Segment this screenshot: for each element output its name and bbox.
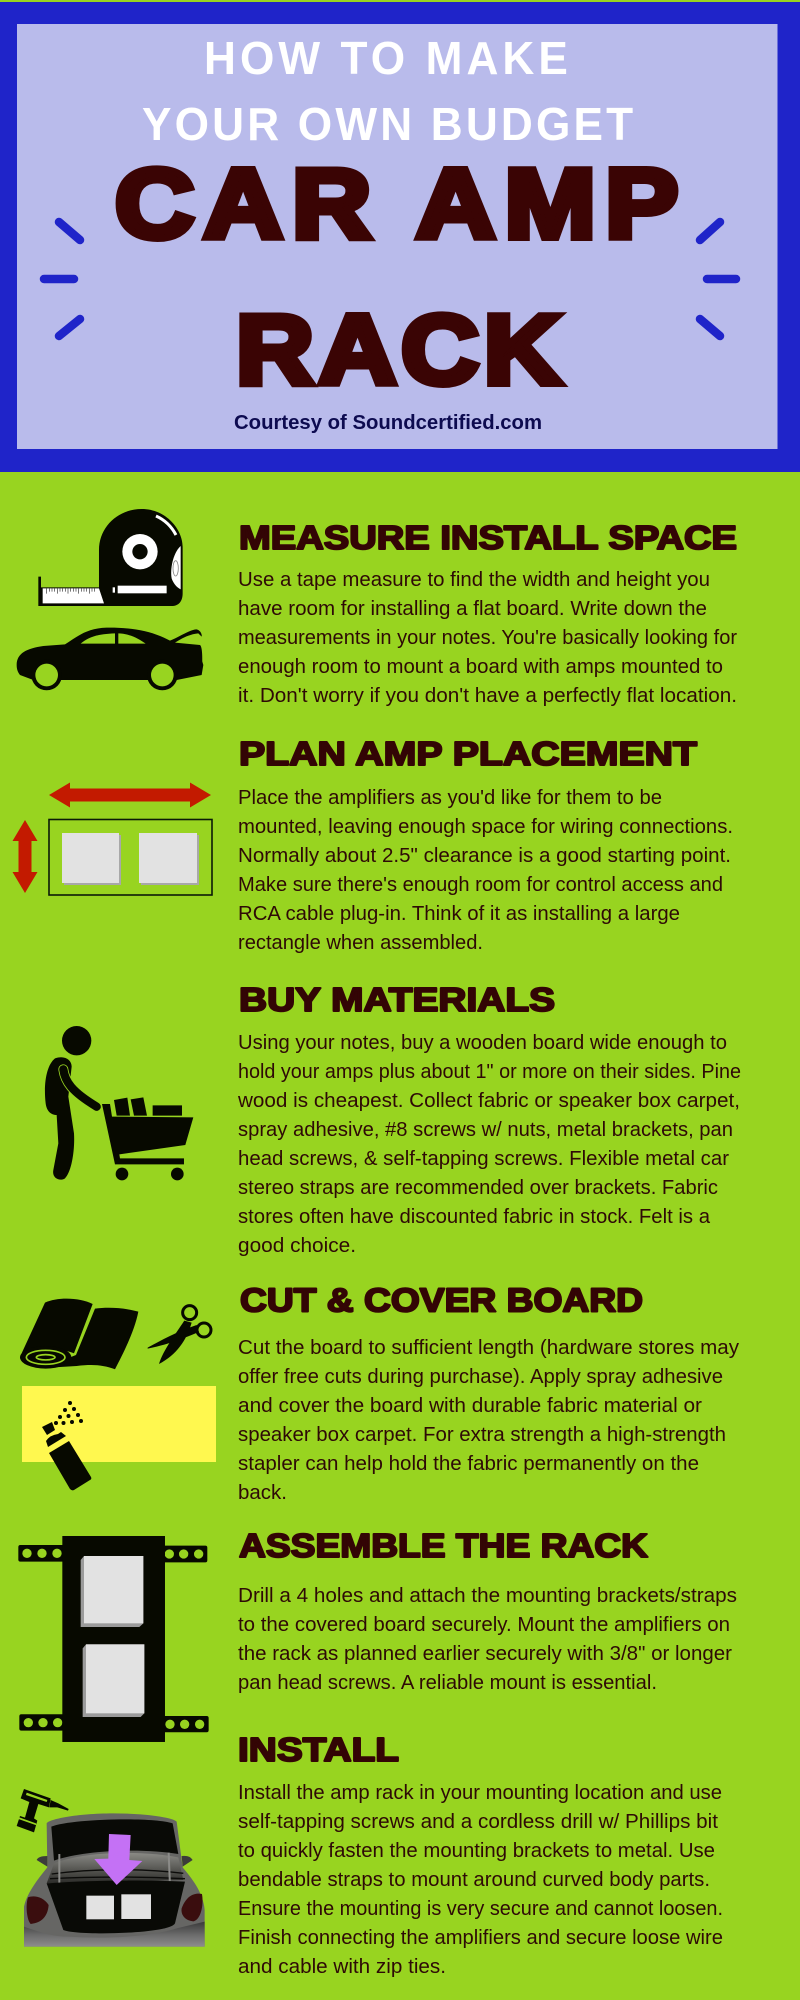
amp top bbox=[81, 1556, 143, 1627]
body text: hold your amps plus about 1" or more on their sides. Pine bbox=[238, 1061, 741, 1083]
board outline bbox=[49, 820, 212, 895]
amp right bbox=[121, 1894, 151, 1919]
heading: INSTALL bbox=[238, 1731, 399, 1768]
icon: shopper with cart bbox=[45, 1026, 193, 1180]
icon: cordless drill bbox=[17, 1789, 69, 1832]
body text: measurements in your notes. You're basically looking for bbox=[238, 627, 737, 649]
body text: good choice. bbox=[238, 1235, 356, 1257]
car body bbox=[24, 1813, 205, 1947]
amp 1 bbox=[62, 833, 121, 885]
body text: Ensure the mounting is very secure and cannot loosen. bbox=[238, 1898, 723, 1920]
icon: scissors bbox=[148, 1306, 211, 1364]
icon: assembled amp rack bbox=[18, 1536, 209, 1742]
trunk opening bbox=[47, 1881, 185, 1933]
icon: tape measure bbox=[38, 509, 183, 606]
body text: rectangle when assembled. bbox=[238, 932, 483, 954]
horizontal arrow bbox=[49, 782, 211, 808]
subtitle: YOUR OWN BUDGET bbox=[142, 98, 633, 150]
body text: to quickly fasten the mounting brackets to metal. Use bbox=[238, 1840, 715, 1862]
vertical arrow bbox=[12, 820, 38, 893]
section: assemble the rack bbox=[238, 1527, 737, 1694]
body text: pan head screws. A reliable mount is essential. bbox=[238, 1672, 657, 1694]
body text: RCA cable plug-in. Think of it as installing a large bbox=[238, 903, 680, 925]
yellow spray area bbox=[22, 1386, 216, 1462]
body text: the rack as planned earlier securely with 3/8" or longer bbox=[238, 1643, 732, 1665]
heading: BUY MATERIALS bbox=[239, 981, 555, 1018]
body text bbox=[238, 1585, 737, 1694]
body text: Use a tape measure to find the width and height you bbox=[238, 569, 710, 591]
body text: mounted, leaving enough space for wiring connections. bbox=[238, 816, 733, 838]
body text: bendable straps to mount around curved body parts. bbox=[238, 1869, 710, 1891]
body text bbox=[238, 1337, 739, 1504]
icon: fabric roll bbox=[20, 1299, 138, 1369]
purple arrow bbox=[94, 1834, 142, 1885]
body text: to the covered board securely. Mount the amplifiers on bbox=[238, 1614, 730, 1636]
amp left bbox=[86, 1896, 114, 1919]
heading: PLAN AMP PLACEMENT bbox=[239, 735, 697, 772]
body text: Cut the board to sufficient length (hardware stores may bbox=[238, 1337, 739, 1359]
icon: car with open trunk bbox=[17, 628, 203, 690]
body text: Make sure there's enough room for control access and bbox=[238, 874, 723, 896]
body text: stores often have discounted fabric in stock. Felt is a bbox=[238, 1206, 711, 1228]
body text bbox=[238, 1782, 723, 1978]
trunk band bbox=[47, 1853, 183, 1883]
body text: speaker box carpet. For extra strength a high-strength bbox=[238, 1424, 726, 1446]
body text: wood is cheapest. Collect fabric or speaker box carpet, bbox=[237, 1090, 740, 1112]
amp 2 bbox=[139, 833, 199, 885]
heading: ASSEMBLE THE RACK bbox=[239, 1527, 648, 1564]
heading: MEASURE INSTALL SPACE bbox=[239, 519, 737, 556]
body text: Finish connecting the amplifiers and secure loose wire bbox=[238, 1927, 723, 1949]
heading: CUT & COVER BOARD bbox=[240, 1282, 643, 1319]
header banner bbox=[0, 2, 800, 472]
subtitle: HOW TO MAKE bbox=[204, 32, 568, 84]
section: measure install space bbox=[238, 519, 737, 707]
subtitle bbox=[142, 32, 633, 150]
icon: spray adhesive can bbox=[42, 1401, 91, 1490]
body text: Normally about 2.5" clearance is a good starting point. bbox=[238, 845, 731, 867]
body text: it. Don't worry if you don't have a perfectly flat location. bbox=[238, 685, 737, 707]
body text: and cover the board with durable fabric material or bbox=[238, 1395, 702, 1417]
body text: Using your notes, buy a wooden board wide enough to bbox=[238, 1032, 727, 1054]
board bbox=[62, 1536, 165, 1742]
body text: head screws, & self-tapping screws. Flexible metal car bbox=[238, 1148, 729, 1170]
body text: self-tapping screws and a cordless drill w/ Phillips bit bbox=[238, 1811, 718, 1833]
body text: and cable with zip ties. bbox=[238, 1956, 446, 1978]
body text: have room for installing a flat board. Write down the bbox=[238, 598, 707, 620]
body text: stereo straps are recommended over brackets. Fabric bbox=[238, 1177, 718, 1199]
body text: Place the amplifiers as you'd like for them to be bbox=[238, 787, 662, 809]
body text bbox=[237, 1032, 741, 1257]
icon: car trunk with amps bbox=[24, 1813, 205, 1947]
header inner panel bbox=[17, 24, 778, 449]
body text: Drill a 4 holes and attach the mounting brackets/straps bbox=[238, 1585, 737, 1607]
main title: RACK bbox=[236, 295, 562, 404]
trunk lid interior bbox=[51, 1819, 178, 1861]
body text: spray adhesive, #8 screws w/ nuts, metal brackets, pan bbox=[238, 1119, 733, 1141]
section: cut and cover board bbox=[238, 1282, 739, 1504]
sunburst accents bbox=[44, 222, 736, 336]
main title bbox=[115, 150, 678, 404]
body text: stapler can help hold the fabric permanently on the bbox=[238, 1453, 699, 1475]
body text: enough room to mount a board with amps mounted to bbox=[238, 656, 723, 678]
body text: Install the amp rack in your mounting location and use bbox=[238, 1782, 722, 1804]
credit line: Courtesy of Soundcertified.com bbox=[234, 412, 542, 434]
struts bbox=[59, 1853, 170, 1887]
amp bottom bbox=[83, 1644, 144, 1717]
section: buy materials bbox=[237, 981, 741, 1257]
body text: back. bbox=[238, 1482, 287, 1504]
section: install bbox=[238, 1731, 723, 1978]
icon: amp placement diagram bbox=[12, 782, 212, 895]
main title: CAR AMP bbox=[115, 150, 678, 259]
body text bbox=[238, 569, 737, 707]
tail lights bbox=[27, 1896, 49, 1924]
bumper bbox=[24, 1922, 205, 1947]
body text: offer free cuts during purchase). Apply spray adhesive bbox=[238, 1366, 723, 1388]
section: plan amp placement bbox=[238, 735, 733, 954]
body text bbox=[238, 787, 733, 954]
mounting brackets bbox=[18, 1545, 209, 1732]
